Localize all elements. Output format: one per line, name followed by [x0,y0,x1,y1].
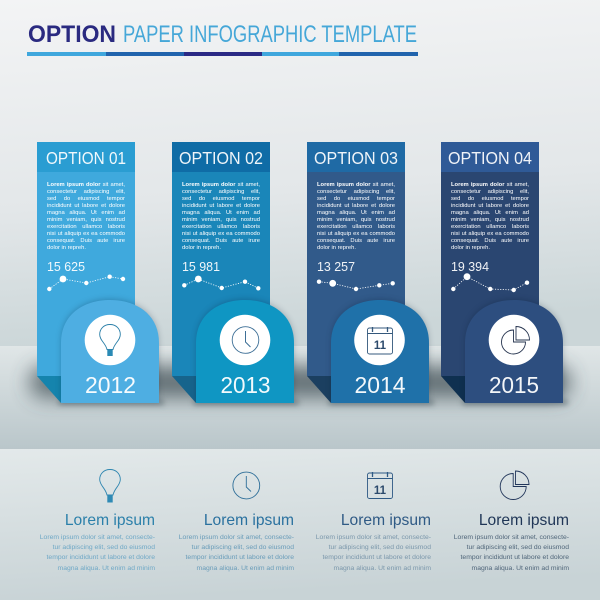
column: chart: tur adipiscing elit, sed do eiusmod [467,544,569,551]
text block [451,182,529,250]
column: idea: Lorem ipsum [65,512,155,528]
column: time: Lorem ipsum dolor sit amet, consecte- [179,534,294,541]
column: time: tur adipiscing elit, sed do eiusmod [192,544,294,551]
text block: minim veniam, quis nostrud [47,216,125,222]
column: calendar: 11 [374,485,387,497]
text block: nisi ut aliquip ex ea commodo [317,230,395,236]
text block: Lorem ipsum dolor sit amet, [47,182,125,188]
text block: consectetur adipiscing elit, [182,188,260,194]
panel: option 03: 2014 [354,372,406,398]
text block: magna aliqua. Ut enim ad [182,210,260,216]
panel: option 01 [37,142,162,404]
panel: option 02: 2013 [220,372,270,398]
text block: nisi ut aliquip ex ea commodo [451,230,529,236]
text block: magna aliqua. Ut enim ad [451,210,529,216]
panel: option 01: OPTION 01 [46,148,126,168]
panel: option 01: 2012 [85,372,136,398]
column: idea [40,469,155,572]
text block: consequat. Duis aute irure [47,238,125,244]
text block: incididunt ut labore et dolore [317,202,395,208]
panel: option 04: 2015 [489,372,539,398]
text block: dolor in repreh. [47,244,86,250]
panel: option 03: OPTION 03 [314,148,398,168]
text block: sed do eiusmod tempor [182,196,260,202]
panel: option 03: 13 257 [317,260,355,274]
panel: option 04: 19 394 [451,260,489,274]
panel: option 02: OPTION 02 [179,148,263,168]
text block: sed do eiusmod tempor [317,196,395,202]
text block: Lorem ipsum dolor sit amet, [451,182,529,188]
column: idea: magna aliqua. Ut enim ad minim [58,565,155,572]
column: calendar: tur adipiscing elit, sed do eiusmod [329,544,431,551]
text block: minim veniam, quis nostrud [317,216,395,222]
text block: dolor in repreh. [317,244,356,250]
text block: exercitation ullamco laboris [451,224,529,230]
text block: exercitation ullamco laboris [182,224,260,230]
column: time: tempor incididunt ut labore et dolore [186,554,294,561]
text block: sed do eiusmod tempor [47,196,125,202]
text block: dolor in repreh. [182,244,221,250]
column: calendar [316,472,431,572]
panel: option 02 [172,142,296,404]
text block: dolor in repreh. [451,244,490,250]
column: idea: Lorem ipsum dolor sit amet, consecte- [40,534,155,541]
panel: option 04 [441,142,566,404]
text block: exercitation ullamco laboris [47,224,125,230]
text block [182,182,260,250]
title [27,21,418,56]
text block: nisi ut aliquip ex ea commodo [47,230,125,236]
column: time: magna aliqua. Ut enim ad minim [197,565,294,572]
column: chart: magna aliqua. Ut enim ad minim [472,565,569,572]
text block: consectetur adipiscing elit, [317,188,395,194]
column: calendar: magna aliqua. Ut enim ad minim [334,565,431,572]
column: calendar: tempor incididunt ut labore et dolore [323,554,431,561]
column: time [179,472,294,572]
text block: consequat. Duis aute irure [451,238,529,244]
column: chart: Lorem ipsum [479,512,569,528]
text block: consequat. Duis aute irure [182,238,260,244]
column: time: Lorem ipsum [204,512,294,528]
column: chart: Lorem ipsum dolor sit amet, consecte- [454,534,569,541]
title: OPTION [28,21,116,48]
text block: consequat. Duis aute irure [317,238,395,244]
text block [317,182,395,250]
text block: nisi ut aliquip ex ea commodo [182,230,260,236]
text block: incididunt ut labore et dolore [47,202,125,208]
column: chart: tempor incididunt ut labore et dolore [461,554,569,561]
column: calendar: Lorem ipsum dolor sit amet, consecte- [316,534,431,541]
panel: option 02: 15 981 [182,260,220,274]
panel: option 03 [307,142,432,404]
text block [47,182,125,250]
text block: Lorem ipsum dolor sit amet, [317,182,395,188]
column: chart [454,470,569,572]
panel: option 03: 11 [374,340,387,352]
text block: incididunt ut labore et dolore [182,202,260,208]
text block: exercitation ullamco laboris [317,224,395,230]
text block: sed do eiusmod tempor [451,196,529,202]
text block: magna aliqua. Ut enim ad [317,210,395,216]
column: idea: tempor incididunt ut labore et dolore [47,554,155,561]
text block: minim veniam, quis nostrud [182,216,260,222]
text block: Lorem ipsum dolor sit amet, [182,182,260,188]
text block: incididunt ut labore et dolore [451,202,529,208]
text block: minim veniam, quis nostrud [451,216,529,222]
text block: magna aliqua. Ut enim ad [47,210,125,216]
column: idea: tur adipiscing elit, sed do eiusmod [53,544,155,551]
column: calendar: Lorem ipsum [341,512,431,528]
panel: option 04: OPTION 04 [448,148,532,168]
panel: option 01: 15 625 [47,260,85,274]
text block: consectetur adipiscing elit, [451,188,529,194]
text block: consectetur adipiscing elit, [47,188,125,194]
